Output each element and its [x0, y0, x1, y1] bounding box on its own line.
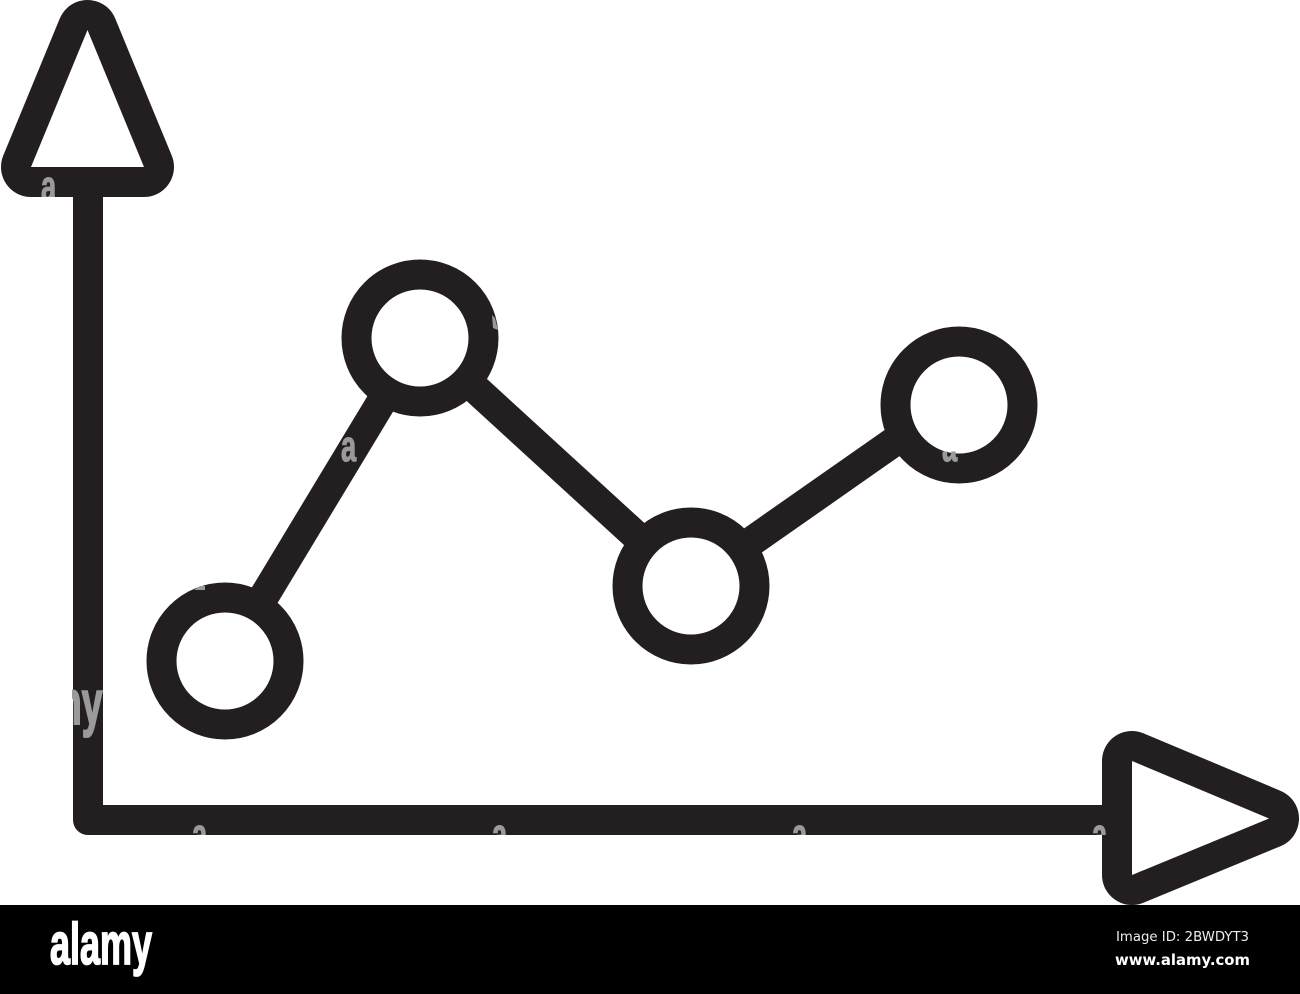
watermark fragments: a — [1092, 809, 1108, 859]
icon: x axis arrowhead — [1132, 761, 1269, 875]
icon: y axis arrowhead — [31, 30, 144, 167]
watermark fragments: a — [341, 421, 357, 471]
data points — [162, 274, 1022, 724]
watermark fragments — [41, 161, 1108, 859]
image id: Image ID: 2BWDYT3 — [1116, 929, 1249, 945]
watermark fragments: a — [792, 809, 808, 859]
watermark fragments: ny — [59, 668, 103, 737]
watermark fragments: a — [942, 421, 958, 471]
watermark fragments: a — [41, 161, 57, 211]
website: www.alamy.com — [1115, 951, 1250, 969]
brand name: alamy — [50, 912, 152, 977]
watermark fragments: a — [492, 809, 508, 859]
watermark footer bar — [0, 905, 1300, 994]
data line — [225, 338, 915, 661]
watermark fragments: a — [192, 809, 208, 859]
y and x axis lines — [88, 180, 1120, 820]
